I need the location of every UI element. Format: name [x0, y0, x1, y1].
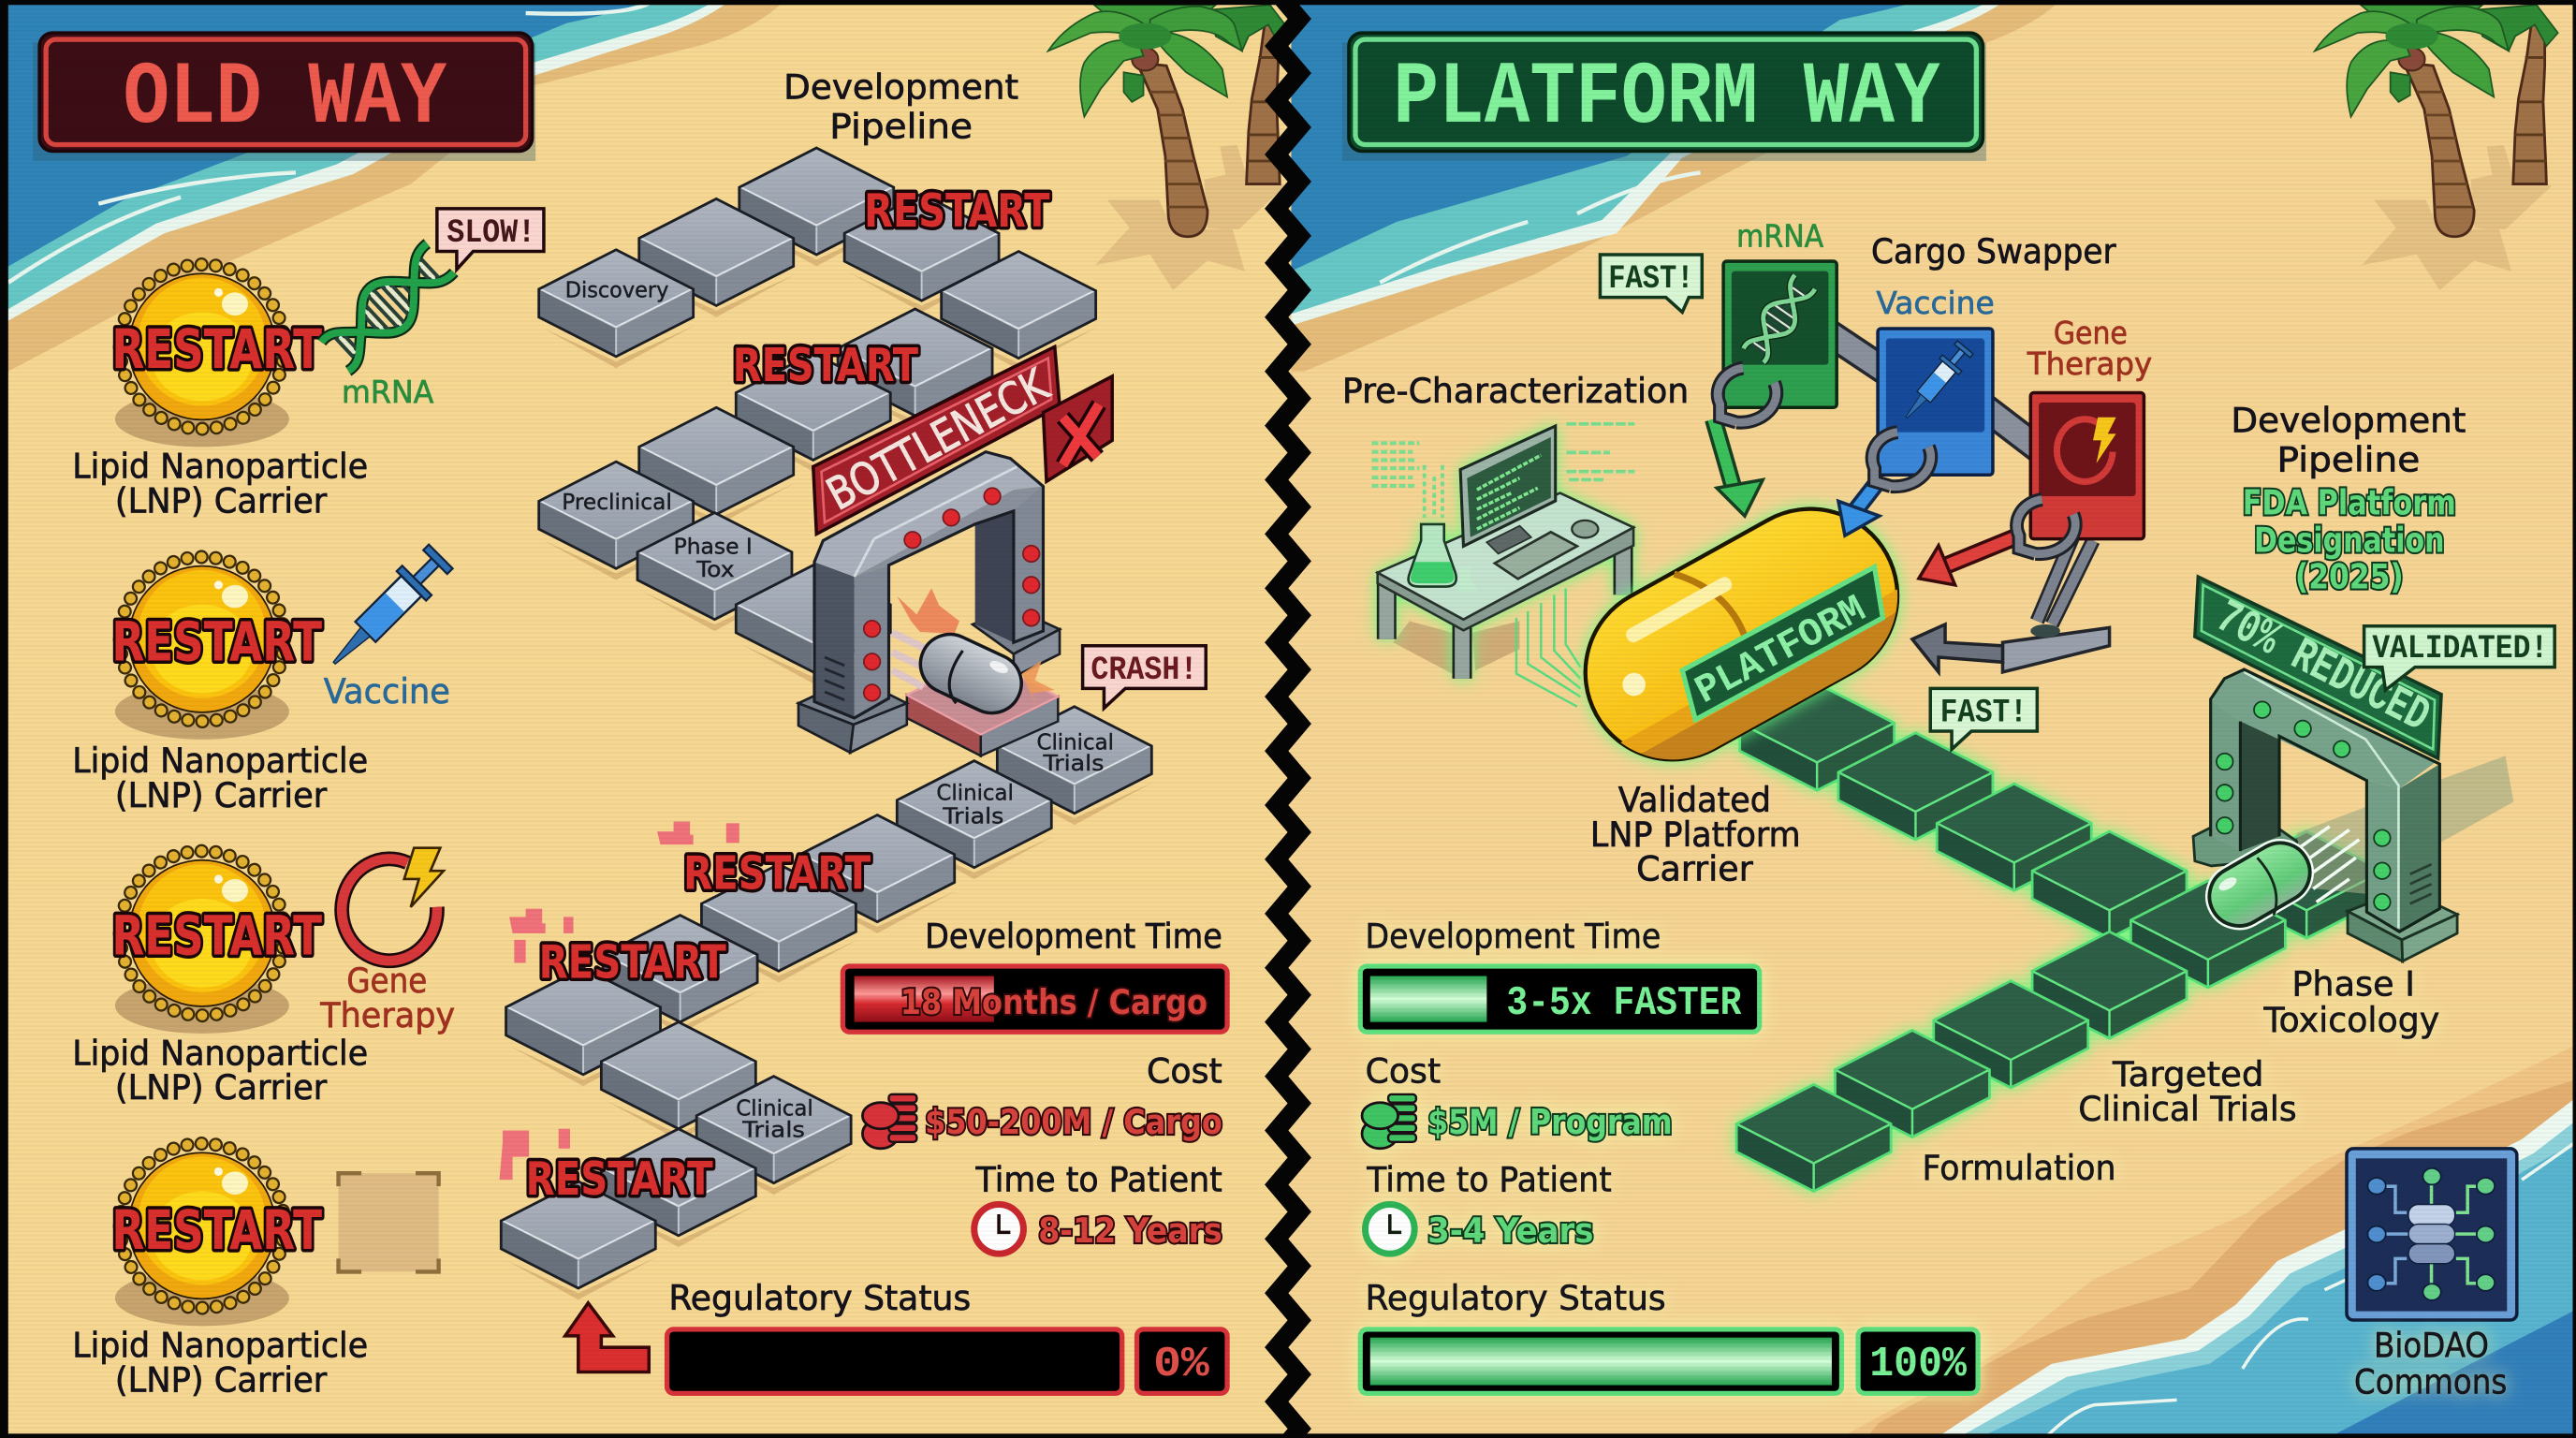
heading: development pipeline old: Development	[783, 66, 1018, 107]
label: FDA platform designation: Designation	[2254, 521, 2445, 561]
old way pipeline tiles: Phase I	[674, 535, 753, 559]
title: old way	[33, 33, 535, 161]
carrier row 3: gene therapy: Gene	[346, 961, 427, 1001]
beach: bottom right ocean	[1840, 1045, 2576, 1438]
callout: crash	[1083, 646, 1206, 708]
validated gate	[2193, 669, 2457, 961]
title: platform way	[1342, 33, 1986, 161]
stat: development time old	[842, 917, 1227, 1032]
label: validated LNP platform carrier	[1590, 780, 1801, 889]
callout: validated	[2364, 626, 2554, 690]
labels along platform pipeline	[1922, 964, 2439, 1188]
title: platform way: PLATFORM WAY	[1393, 49, 1940, 149]
carrier row 1: mRNA: RESTART	[111, 317, 322, 381]
carrier row 1: mRNA: (LNP) Carrier	[115, 481, 328, 521]
callout: fast lower: FAST!	[1940, 694, 2027, 731]
glowing platform pipeline tiles	[1736, 683, 2384, 1191]
cargo card: mRNA: mRNA	[1736, 217, 1823, 254]
old way pipeline tiles: Tox	[695, 558, 735, 582]
restart labels on pipeline: RESTART	[864, 183, 1050, 238]
title: old way: OLD WAY	[124, 49, 446, 149]
cargo card: gene therapy: Therapy	[2027, 345, 2152, 382]
labels along platform pipeline: Phase I	[2291, 964, 2415, 1005]
stat: time to patient old	[974, 1159, 1222, 1254]
carrier row 4: empty slot	[72, 1144, 439, 1401]
carrier row 2: vaccine	[72, 542, 456, 815]
label: FDA platform designation: FDA Platform	[2243, 482, 2456, 522]
palm trees: platform way	[2315, 5, 2558, 290]
carrier row 3: gene therapy: Lipid Nanoparticle	[72, 1033, 368, 1073]
carrier row 4: empty slot: RESTART	[111, 1198, 322, 1262]
heading: development pipeline platform: Pipeline	[2277, 440, 2420, 480]
divider: jagged center line	[1277, 0, 1299, 1438]
restart labels on pipeline: RESTART	[683, 846, 871, 901]
restart labels on pipeline: RESTART	[733, 338, 919, 392]
label: validated LNP platform carrier: LNP Platform	[1590, 814, 1801, 855]
cargo card: vaccine: Vaccine	[1876, 285, 1995, 321]
stat: development time platform: 3-5x FASTER	[1506, 980, 1742, 1027]
stat: development time old: 18 Months / Cargo	[900, 982, 1208, 1022]
callout: fast top	[1600, 255, 1702, 312]
label: FDA platform designation	[2243, 482, 2456, 596]
stat: cost platform: Cost	[1365, 1051, 1441, 1092]
carrier row 1: mRNA: mRNA	[342, 374, 434, 410]
70 percent reduced banner	[2195, 577, 2441, 758]
heading: development pipeline platform: Development	[2231, 401, 2466, 441]
stat: development time platform: Development Time	[1365, 917, 1661, 957]
labels along platform pipeline: Targeted	[2112, 1054, 2264, 1094]
heading: development pipeline platform	[2231, 401, 2466, 480]
panel: platform way background	[1292, 0, 2576, 1438]
palm trees: old way	[1048, 5, 1292, 290]
70 percent reduced banner: 70% REDUCED	[2207, 592, 2437, 744]
old way pipeline tiles: Clinical	[1036, 730, 1114, 755]
stat: development time old: Development Time	[925, 917, 1222, 957]
old way pipeline tiles: Trials	[741, 1119, 805, 1143]
label: biodao commons	[2354, 1326, 2507, 1401]
cargo card: vaccine	[1876, 285, 1995, 475]
stat: regulatory status old: 0%	[1153, 1340, 1209, 1388]
carrier row 3: gene therapy: (LNP) Carrier	[115, 1067, 328, 1108]
stat: cost old	[862, 1051, 1222, 1149]
red debris splats	[500, 822, 739, 1180]
callout: validated: VALIDATED!	[2372, 630, 2548, 668]
bottleneck banner: BOTTLENECK	[819, 359, 1059, 521]
stat: regulatory status old	[667, 1278, 1227, 1393]
restart labels on pipeline: RESTART	[526, 1152, 713, 1206]
speed beam	[2297, 756, 2513, 896]
stat: time to patient platform: Time to Patient	[1366, 1159, 1612, 1199]
carrier row 2: vaccine: RESTART	[111, 610, 322, 674]
beach: old way ocean	[0, 0, 785, 372]
stat: time to patient old: 8-12 Years	[1038, 1211, 1222, 1251]
beach: platform way ocean	[1292, 0, 2060, 372]
callout: slow	[437, 209, 544, 270]
carrier row 2: vaccine: (LNP) Carrier	[115, 775, 328, 815]
old way pipeline tiles: Trials	[1042, 752, 1104, 776]
old way pipeline tiles	[501, 148, 1153, 1299]
carrier row 1: mRNA: Lipid Nanoparticle	[72, 447, 368, 487]
icon: biodao commons network	[2347, 1149, 2517, 1320]
stat: time to patient platform: 3-4 Years	[1427, 1211, 1593, 1251]
heading: development pipeline old: Pipeline	[829, 106, 973, 146]
stat: cost old: $50-200M / Cargo	[925, 1102, 1222, 1142]
arrow: back to start	[565, 1303, 649, 1372]
stat: development time platform	[1360, 917, 1760, 1032]
stat: regulatory status platform: 100%	[1869, 1340, 1967, 1388]
green capsule with speed lines	[2199, 827, 2359, 937]
panel: old way background	[0, 0, 1292, 1438]
old way pipeline tiles: Clinical	[736, 1097, 813, 1122]
callout: slow: SLOW!	[446, 214, 535, 252]
platform label tag: PLATFORM	[1689, 587, 1873, 714]
stat: regulatory status platform: Regulatory Status	[1365, 1278, 1666, 1318]
stat: cost platform: $5M / Program	[1427, 1102, 1673, 1142]
carrier row 3: gene therapy: RESTART	[111, 904, 322, 968]
carrier row 1: mRNA	[72, 239, 459, 521]
old way pipeline tiles: Preclinical	[562, 491, 672, 515]
labels along platform pipeline: Toxicology	[2263, 1000, 2439, 1040]
label: pre-characterization: Pre-Characterization	[1342, 371, 1689, 411]
arrows from cargo to platform	[1714, 419, 2019, 672]
restart labels on pipeline: RESTART	[539, 934, 726, 989]
stat: regulatory status old: Regulatory Status	[668, 1278, 971, 1318]
old way pipeline tiles: Trials	[942, 804, 1003, 829]
labels along platform pipeline: Formulation	[1922, 1148, 2116, 1188]
stat: time to patient platform	[1365, 1159, 1612, 1254]
callout: crash: CRASH!	[1090, 652, 1197, 689]
label: biodao commons: BioDAO	[2374, 1326, 2489, 1366]
cargo card: mRNA	[1723, 217, 1837, 407]
cargo card: gene therapy	[2027, 315, 2152, 539]
carrier row 4: empty slot: Lipid Nanoparticle	[72, 1326, 368, 1366]
stat: cost platform	[1362, 1051, 1673, 1149]
carrier row 2: vaccine: Vaccine	[324, 671, 450, 712]
labels along platform pipeline: Clinical Trials	[2078, 1089, 2297, 1129]
old way pipeline tiles: Clinical	[936, 782, 1014, 806]
platform capsule	[1573, 496, 1911, 773]
old way pipeline tiles: Discovery	[565, 279, 668, 303]
restart labels on pipeline	[526, 183, 1050, 1206]
carrier row 4: empty slot: (LNP) Carrier	[115, 1360, 328, 1401]
carrier row 2: vaccine: Lipid Nanoparticle	[72, 741, 368, 781]
pre-characterization workstation	[1372, 424, 1634, 707]
heading: development pipeline old	[783, 66, 1018, 146]
stat: time to patient old: Time to Patient	[975, 1159, 1222, 1199]
label: FDA platform designation: (2025)	[2295, 556, 2404, 596]
label: validated LNP platform carrier: Carrier	[1636, 849, 1754, 889]
callout: fast top: FAST!	[1608, 260, 1694, 298]
stat: cost old: Cost	[1147, 1051, 1222, 1092]
cargo claws	[1718, 368, 2075, 554]
cargo card: gene therapy: Gene	[2054, 315, 2128, 351]
callout: fast lower	[1930, 688, 2037, 749]
label: validated LNP platform carrier: Validated	[1618, 780, 1771, 820]
carrier row 3: gene therapy: Therapy	[319, 995, 455, 1035]
cargo swapper arms	[1827, 332, 2110, 672]
label: cargo swapper: Cargo Swapper	[1871, 231, 2116, 271]
carrier row 3: gene therapy	[72, 848, 455, 1108]
bottleneck gate	[798, 452, 1060, 756]
stat: regulatory status platform	[1360, 1278, 1978, 1393]
label: biodao commons: Commons	[2354, 1361, 2507, 1401]
